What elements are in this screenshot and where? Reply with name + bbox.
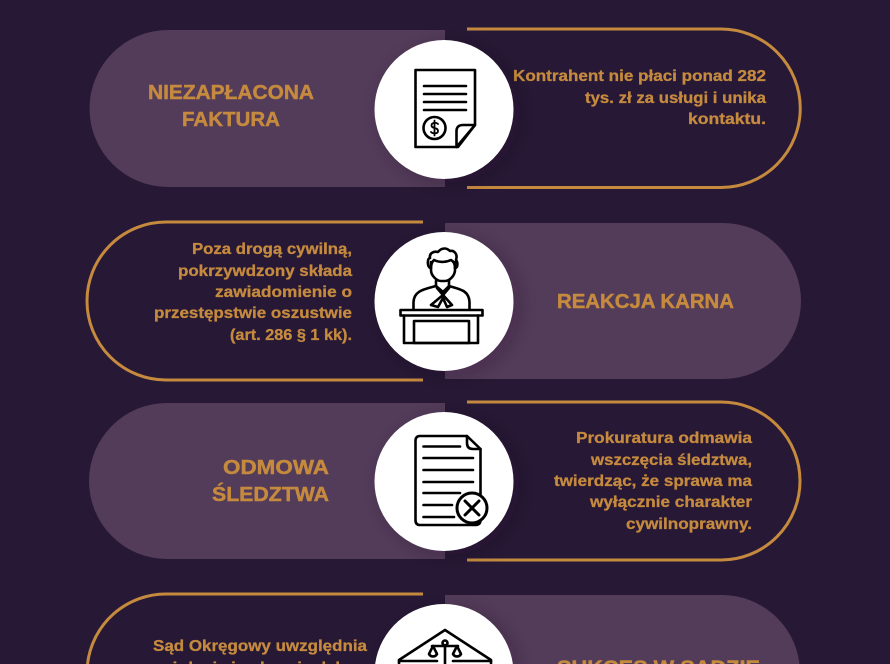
panel: odmowa śledztwa — [89, 402, 800, 560]
text: criminal notice description — [154, 241, 352, 344]
panel: sukces w sądzie — [88, 594, 799, 664]
icon: person at lectern — [400, 248, 482, 343]
heading: odmowa śledztwa: ODMOWA — [223, 456, 329, 479]
circle: court icon background — [375, 604, 513, 664]
heading: niezapłacona faktura: FAKTURA — [182, 108, 280, 131]
heading: niezapłacona faktura — [148, 81, 314, 131]
circle: invoice icon background — [374, 40, 514, 179]
text: refusal description — [554, 430, 752, 533]
outline pill: court description — [88, 594, 423, 664]
icon: court with scales — [399, 630, 491, 664]
text: invoice description — [513, 68, 766, 128]
circle: refusal icon background — [374, 412, 514, 551]
icon: invoice — [416, 70, 475, 147]
filled pill: sukces w sądzie — [445, 595, 799, 664]
text: invoice description: kontaktu. — [688, 111, 766, 128]
filled pill: reakcja karna — [445, 223, 801, 379]
text: invoice description: tys. zł za usługi i unika — [585, 90, 766, 107]
text: refusal description: twierdząc, że sprawa ma — [554, 473, 752, 490]
text: refusal description: Prokuratura odmawia — [576, 430, 752, 447]
icon: document with cross — [416, 436, 487, 525]
circle: judge icon background — [374, 232, 514, 371]
text: refusal description: cywilnoprawny. — [626, 516, 752, 533]
text: refusal description: wyłącznie charakter — [589, 494, 752, 511]
heading: niezapłacona faktura: NIEZAPŁACONA — [148, 81, 314, 104]
heading: odmowa śledztwa: ŚLEDZTWA — [212, 482, 329, 506]
text: court description — [153, 638, 367, 664]
heading: odmowa śledztwa — [212, 456, 329, 506]
outline pill: criminal notice description — [87, 222, 423, 380]
panel: niezapłacona faktura — [90, 29, 800, 188]
text: criminal notice description: pokrzywdzony składa — [178, 263, 352, 280]
heading: reakcja karna: REAKCJA KARNA — [557, 290, 734, 313]
text: criminal notice description: Poza drogą cywilną, — [192, 241, 352, 258]
text: criminal notice description: (art. 286 § 1 kk). — [230, 327, 352, 344]
text: court description: Sąd Okręgowy uwzględnia — [153, 638, 367, 655]
text: refusal description: wszczęcia śledztwa, — [590, 452, 752, 469]
outline pill: invoice description — [467, 29, 800, 188]
filled pill: odmowa śledztwa — [89, 403, 445, 559]
text: invoice description: Kontrahent nie płaci ponad 282 — [513, 68, 766, 85]
text: criminal notice description: zawiadomienie o — [215, 284, 352, 301]
filled pill: niezapłacona faktura — [90, 30, 445, 187]
panel: reakcja karna — [87, 222, 801, 380]
outline pill: refusal description — [467, 402, 800, 560]
text: criminal notice description: przestępstwie oszustwie — [154, 305, 352, 322]
